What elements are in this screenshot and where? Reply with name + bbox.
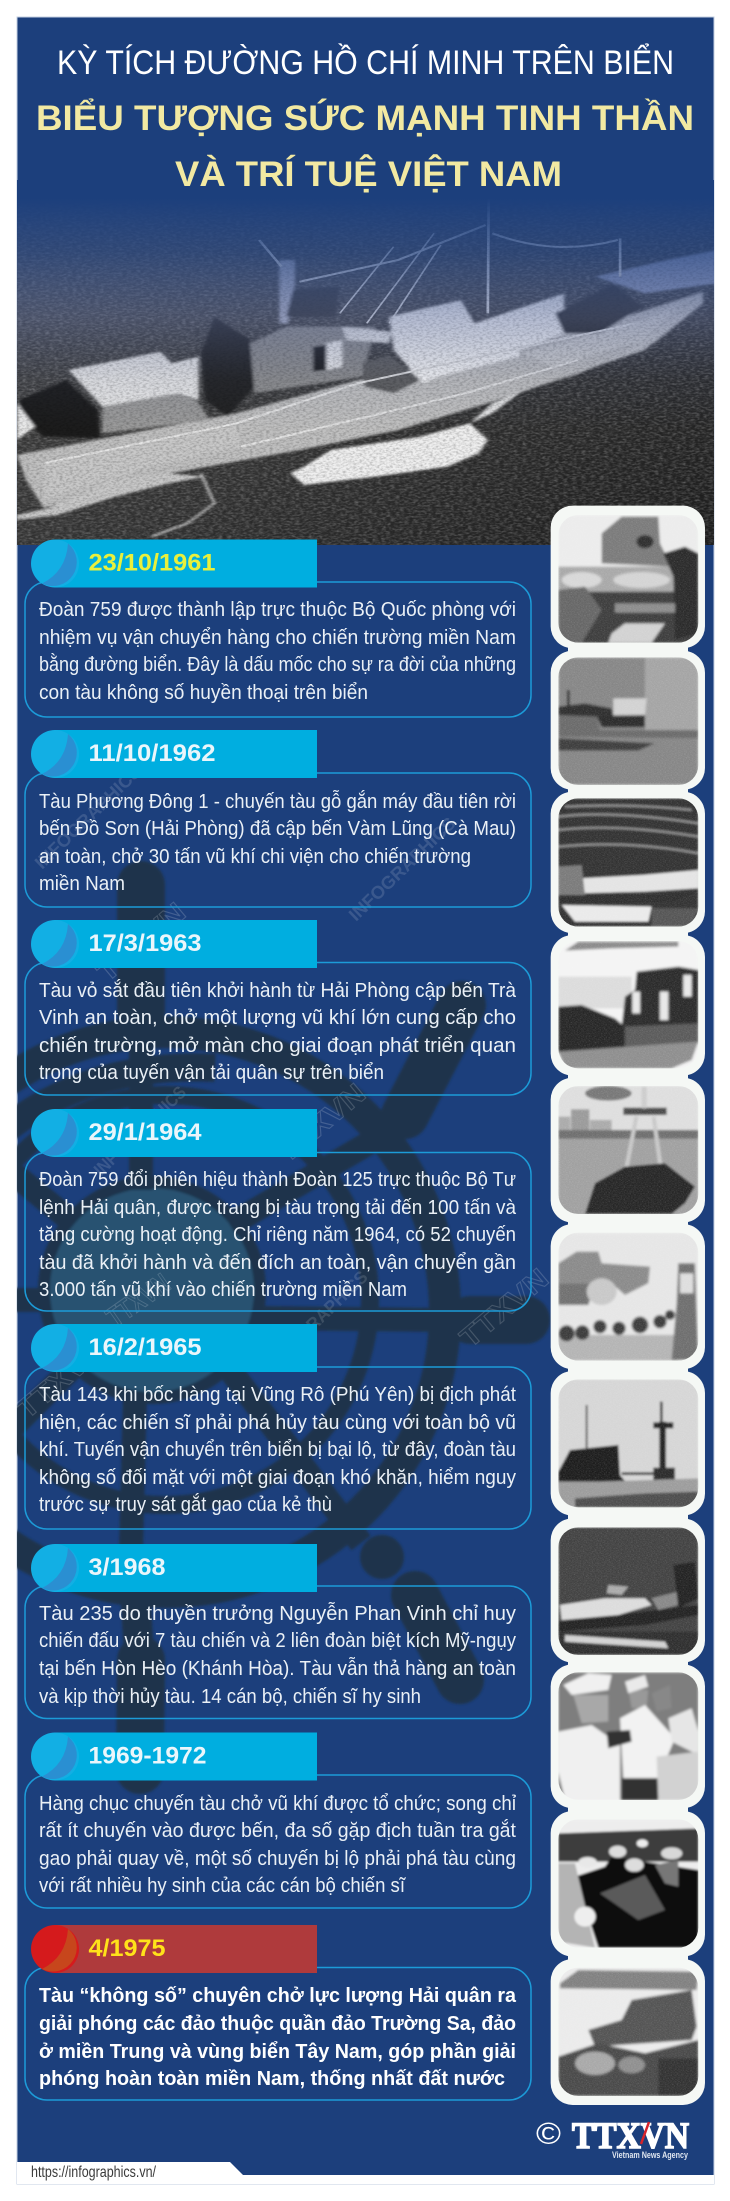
logo: TTXVN: TTXVN xyxy=(572,2116,689,2157)
date tab: 23/10/1961 xyxy=(88,550,216,576)
description xyxy=(39,979,517,1084)
description: gao phải quay về, một số chuyến bị lộ phải phá tàu cùng xyxy=(39,1847,516,1870)
title line 2: BIỂU TƯỢNG SỨC MẠNH TINH THẦN xyxy=(36,98,694,138)
watermarks: TTXVN xyxy=(101,1267,176,1333)
description: nhiệm vụ vận chuyển hàng cho chiến trường miền Nam xyxy=(39,626,516,649)
description: con tàu không số huyền thoại trên biển xyxy=(39,681,368,704)
description: trước sự truy sát gắt gao của kẻ thù xyxy=(39,1493,332,1516)
card: 29/1/1964 xyxy=(25,1109,531,1311)
description: Đoàn 759 được thành lập trực thuộc Bộ Quốc phòng với xyxy=(39,598,516,621)
logo: TTXVN: © xyxy=(536,2116,561,2151)
card: 16/2/1965 xyxy=(25,1324,531,1529)
description xyxy=(39,598,516,704)
description: với rất nhiều hy sinh của các cán bộ chiến sĩ xyxy=(39,1874,406,1897)
watermarks xyxy=(11,761,554,1425)
date tab xyxy=(31,1324,317,1372)
card: 23/10/1961 xyxy=(25,540,531,717)
photo 6: crowd watching ship launch xyxy=(551,1224,705,1369)
date tab xyxy=(31,1544,317,1592)
description: Tàu Phương Đông 1 - chuyến tàu gỗ gắn máy đầu tiên rời xyxy=(39,790,516,813)
description xyxy=(39,1383,517,1516)
background ship wheel xyxy=(0,885,526,1770)
description: tàu đã khởi hành và đến đích an toàn, vận chuyển gần xyxy=(39,1251,516,1274)
date tab: 4/1975 xyxy=(88,1935,166,1962)
description: chiến trường, mở màn cho giai đoạn phát triển quan xyxy=(39,1034,516,1057)
watermarks: INFOGRAPHICS xyxy=(263,1267,372,1373)
description: Tàu “không số” chuyên chở lực lượng Hải quân ra xyxy=(39,1984,517,2007)
date tab xyxy=(31,540,317,588)
card: 11/10/1962 xyxy=(25,730,531,907)
footer URL strip xyxy=(17,2162,714,2184)
photo 7: ship silhouette with mast xyxy=(551,1371,705,1516)
description: không số đối mặt với một giai đoạn khó khăn, hiểm nguy xyxy=(39,1466,517,1489)
description: Tàu 143 khi bốc hàng tại Vũng Rô (Phú Yên) bị địch phát xyxy=(39,1383,516,1406)
date tab xyxy=(31,730,317,778)
description: Tàu 235 do thuyền trưởng Nguyễn Phan Vinh chỉ huy xyxy=(39,1602,517,1625)
date tab: 3/1968 xyxy=(88,1554,166,1581)
photo 5: ship bow facing city xyxy=(551,1078,705,1223)
watermarks: TTXVN xyxy=(271,1077,371,1169)
description xyxy=(39,790,516,895)
description: an toàn, chở 30 tấn vũ khí chi viện cho chiến trường xyxy=(39,845,471,868)
description: lệnh Hải quân, được trang bị tàu trọng tải đến 100 tấn và xyxy=(39,1196,517,1219)
hero photo: ship at sea xyxy=(17,180,717,545)
description: Vinh an toàn, chở một lượng vũ khí lớn cung cấp cho xyxy=(39,1006,516,1029)
photo 11: crowd welcoming warship xyxy=(551,1959,705,2105)
description: Hàng chục chuyến tàu chở vũ khí được tổ chức; song chỉ xyxy=(39,1792,516,1815)
card: 3/1968 xyxy=(25,1544,531,1718)
date tab xyxy=(31,920,317,968)
description: ở miền Trung và vùng biển Tây Nam, góp phần giải xyxy=(39,2040,516,2063)
description: tăng cường hoạt động. Chỉ riêng năm 1964, có 52 chuyến xyxy=(39,1223,516,1246)
card: 1969-1972 xyxy=(25,1732,531,1908)
photo 2: warship side view xyxy=(551,651,705,790)
card: 4/1975 xyxy=(25,1925,531,2100)
description: bến Đồ Sơn (Hải Phòng) đã cập bến Vàm Lũng (Cà Mau) xyxy=(39,817,516,840)
watermarks: TTXVN xyxy=(91,896,191,988)
description: chiến đấu với 7 tàu chiến và 2 liên đoàn biệt kích Mỹ-ngụy xyxy=(39,1629,517,1652)
logo: TTXVN xyxy=(536,2116,689,2161)
description: và kịp thời hủy tàu. 14 cán bộ, chiến sĩ hy sinh xyxy=(39,1685,421,1708)
description xyxy=(39,1602,517,1708)
footer URL strip: https://infographics.vn/ xyxy=(31,2164,156,2181)
description xyxy=(39,1984,517,2090)
date tab xyxy=(31,1109,317,1157)
photo 4: dark vessel with crew xyxy=(551,935,705,1076)
date tab: 1969-1972 xyxy=(88,1742,206,1770)
date tab xyxy=(31,1732,317,1780)
watermarks: INFOGRAPHICS xyxy=(31,761,145,873)
title line 3: VÀ TRÍ TUỆ VIỆT NAM xyxy=(175,154,562,194)
description xyxy=(39,1792,516,1897)
watermarks: TTXVN xyxy=(11,1333,111,1425)
photo 3: boat with white wake xyxy=(551,792,705,933)
description: miền Nam xyxy=(39,872,125,895)
description: Tàu vỏ sắt đầu tiên khởi hành từ Hải Phòng cập bến Trà xyxy=(39,979,517,1002)
photo 9: naval officers xyxy=(551,1664,705,1808)
watermarks: TTXVN xyxy=(454,1262,554,1354)
description: khí. Tuyến vận chuyển trên biển bị bại lộ, từ đây, đoàn tàu xyxy=(39,1438,516,1461)
date tab: 11/10/1962 xyxy=(88,740,216,767)
description: giải phóng các đảo thuộc quần đảo Trường Sa, đảo xyxy=(39,2012,516,2035)
photo 1: crowd on ship deck xyxy=(551,506,705,648)
description: rất ít chuyến vào được bến, đa số gặp địch tuần tra gắt xyxy=(39,1819,516,1842)
description: tại bến Hòn Hèo (Khánh Hòa). Tàu vẫn thả hàng an toàn xyxy=(39,1657,516,1680)
description: 3.000 tấn vũ khí vào chiến trường miền Nam xyxy=(39,1278,407,1301)
description: trọng của tuyến vận tải quân sự trên biển xyxy=(39,1061,384,1084)
watermarks: INFOGRAPHICS xyxy=(90,1082,190,1180)
description: phóng hoàn toàn miền Nam, thống nhất đất nước xyxy=(39,2067,505,2090)
description xyxy=(39,1168,517,1301)
watermarks: INFOGRAPHICS xyxy=(345,813,459,925)
description: Đoàn 759 đổi phiên hiệu thành Đoàn 125 trực thuộc Bộ Tư xyxy=(39,1168,516,1191)
date tab xyxy=(31,1925,317,1973)
description: bằng đường biển. Đây là dấu mốc cho sự ra đời của những xyxy=(39,653,516,676)
card: 17/3/1963 xyxy=(25,920,531,1095)
title line 1: KỲ TÍCH ĐƯỜNG HỒ CHÍ MINH TRÊN BIỂN xyxy=(57,44,674,82)
photo 8: boat on rough sea xyxy=(551,1518,705,1663)
date tab: 29/1/1964 xyxy=(88,1119,202,1146)
date tab: 17/3/1963 xyxy=(88,930,202,957)
description: hiện, các chiến sĩ phải phá hủy tàu cùng với toàn bộ vũ xyxy=(39,1411,516,1434)
logo: TTXVN: Vietnam News Agency xyxy=(612,2150,689,2161)
photo 10: sailors carrying crate xyxy=(551,1811,705,1957)
date tab: 16/2/1965 xyxy=(88,1334,202,1361)
